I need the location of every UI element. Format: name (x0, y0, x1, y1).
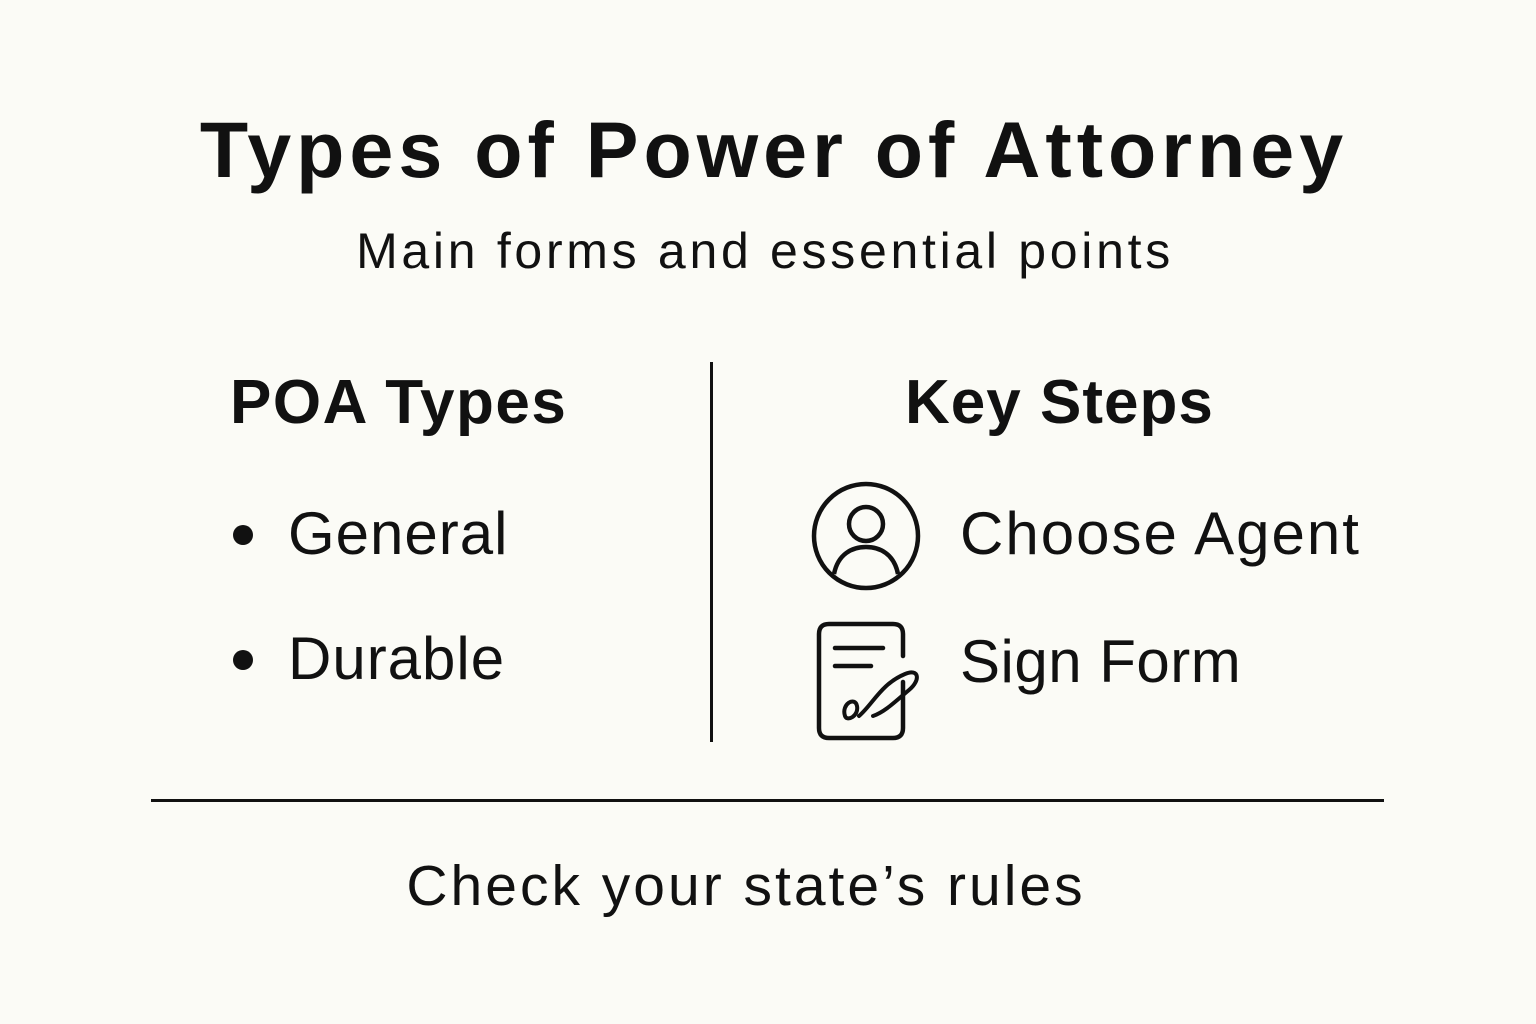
heading: POA Types: POA Types (230, 368, 567, 437)
step: sign form (816, 622, 1241, 740)
icon: signed document (816, 622, 919, 740)
step: choose agent (812, 482, 1361, 590)
heading: Key Steps: Key Steps (905, 368, 1214, 437)
subtitle: Main forms and essential points (356, 223, 1174, 279)
divider: horizontal (151, 799, 1384, 802)
bullet item: Durable: Durable (288, 625, 505, 692)
panel: key steps (812, 368, 1361, 740)
panel: POA types (230, 368, 567, 692)
footer note: Check your state’s rules (406, 854, 1086, 918)
icon: person (812, 482, 920, 590)
bullet item: General: General (288, 500, 508, 567)
label: Choose Agent: Choose Agent (960, 500, 1361, 567)
label: Sign Form: Sign Form (960, 628, 1241, 695)
divider: vertical (710, 362, 713, 742)
title: Types of Power of Attorney (200, 105, 1348, 194)
